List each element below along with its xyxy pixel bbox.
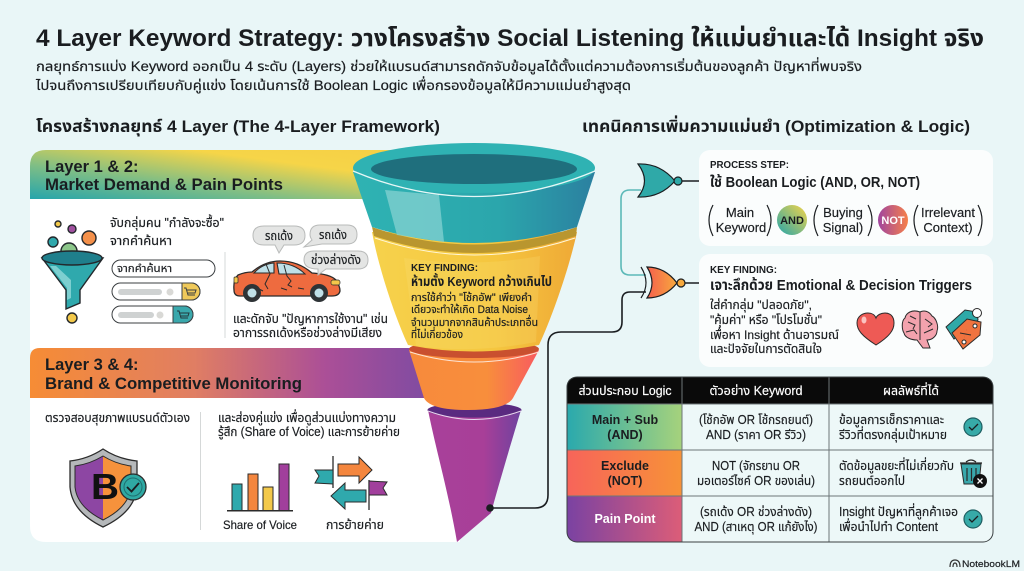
boolean formula [709, 205, 982, 236]
layer 1 header [30, 150, 400, 199]
funnel teal layer [353, 143, 595, 243]
competitor text: และส่องคู่แข่ง เพื่อดูส่วนแบ่งทางความ [218, 409, 396, 425]
icon: brain [902, 311, 938, 348]
funnel purple layer [428, 402, 522, 542]
row label: exclude: Exclude [601, 459, 649, 473]
funnel [353, 143, 595, 542]
pain point text: อาการรถเด้งหรือช่วงล่างมีเสียง [233, 326, 382, 340]
triggers body text [710, 298, 839, 356]
boolean formula: NOT [881, 215, 905, 227]
layer 3 header [30, 348, 440, 398]
funnel key finding: ที่ไม่เกี่ยวข้อง [411, 326, 463, 341]
keyword examples [694, 413, 818, 534]
layer 3 header: Layer 3 & 4: [45, 356, 139, 374]
share of voice chart [223, 464, 297, 532]
notebooklm mark: NotebookLM [962, 559, 1020, 570]
boolean formula: AND [780, 215, 804, 227]
keyword examples: (โช้กอัพ OR โช้กรถยนต์) [699, 413, 813, 427]
icon: damaged car [234, 261, 340, 302]
boolean formula: Irrelevant [921, 205, 975, 220]
intro text [35, 57, 862, 94]
layer 3 header: Brand & Competitive Monitoring [45, 375, 302, 393]
row label: main and sub [567, 404, 682, 450]
pain point text: และดักจับ "ปัญหาการใช้งาน" เช่น [233, 312, 388, 326]
panel: layer 3 and 4 [30, 348, 460, 542]
icon: heart [857, 313, 894, 345]
icon: trash [960, 460, 987, 488]
icon: brand switching arrows [315, 456, 387, 510]
heading: optimization: เทคนิคการเพิ่มความแม่นยำ (Optimization & Logic) [582, 115, 970, 136]
pain point text [233, 312, 388, 340]
table header: ส่วนประกอบ Logic [578, 384, 672, 398]
row label: exclude [567, 450, 682, 496]
panel: key finding triggers [699, 254, 993, 367]
panel: key finding triggers: เจาะลึกด้วย Emotional & Decision Triggers [710, 276, 972, 294]
search bars: จากคำค้นหา [117, 263, 172, 275]
search bars [112, 260, 215, 323]
search intent text [110, 214, 224, 248]
funnel key finding: KEY FINDING: [411, 262, 478, 274]
icon: funnel with balls [42, 221, 103, 323]
panel: process step [699, 150, 993, 246]
row label: main and sub: (AND) [607, 428, 643, 442]
triggers body text: เพื่อหา Insight ด้านอารมณ์ [710, 326, 839, 342]
icon: check [964, 510, 982, 528]
icon: price tags [946, 308, 982, 349]
funnel yellow layer [372, 227, 577, 352]
boolean formula: Main [726, 205, 754, 220]
boolean formula: Context) [923, 220, 973, 235]
funnel orange layer [409, 340, 539, 410]
boolean formula: Buying [823, 205, 863, 220]
intro text: ไปจนถึงการเปรียบเทียบกับคู่แข่ง โดยเน้นการใช้ Boolean Logic เพื่อกรองข้อมูลให้มีความแม่นยำสูงสุด [35, 76, 631, 94]
boolean formula: Signal) [823, 220, 863, 235]
connector: teal line between gates [621, 190, 646, 275]
title: 4 Layer Keyword Strategy: วางโครงสร้าง Social Listening ให้แม่นยำและได้ Insight จริง [36, 24, 984, 52]
competitor text: รู้สึก (Share of Voice) และการย้ายค่าย [218, 425, 400, 439]
funnel key finding: ห้ามตั้ง Keyword กว้างเกินไป [411, 272, 552, 289]
panel: process step: PROCESS STEP: [710, 159, 789, 171]
keyword examples: (รถเด้ง OR ช่วงล่างดัง) [700, 505, 812, 519]
label: brand switching: การย้ายค่าย [326, 518, 384, 532]
results: ข้อมูลการเช็กราคาและ [839, 413, 944, 427]
table header: ตัวอย่าง Keyword [710, 384, 803, 398]
heading: framework: โครงสร้างกลยุทธ์ 4 Layer (The 4-Layer Framework) [36, 117, 440, 137]
search intent text: จับกลุ่มคน "กำลังจะซื้อ" [110, 214, 224, 230]
competitor text [218, 409, 400, 439]
layer 1 header: Layer 1 & 2: [45, 158, 139, 176]
table header [567, 377, 993, 404]
panel: key finding triggers: KEY FINDING: [710, 264, 777, 276]
table header: ผลลัพธ์ที่ได้ [883, 382, 939, 398]
results: รถยนต์ออกไป [839, 474, 905, 488]
speech bubbles [253, 225, 368, 275]
logic gate: orange [641, 267, 699, 298]
icon: brand shield: B [91, 466, 119, 507]
boolean formula: Keyword [716, 220, 766, 235]
funnel key finding: เดียวจะทำให้เกิด Data Noise [411, 304, 528, 316]
share of voice chart: Share of Voice [223, 518, 297, 532]
table: logic components [567, 377, 993, 542]
speech bubbles: รถเด้ง [319, 228, 347, 242]
keyword examples: NOT (จักรยาน OR [712, 459, 800, 473]
speech bubbles: รถเด้ง [265, 229, 293, 243]
results: Insight ปัญหาที่ลูกค้าเจอ [839, 503, 958, 519]
intro text: กลยุทธ์การแบ่ง Keyword ออกเป็น 4 ระดับ (Layers) ช่วยให้แบรนด์สามารถดักจับข้อมูลได้ตั้งแต่ความต้องการเริ่มต้นของลูกค้า ปัญหาที่พบจริง [36, 57, 862, 75]
keyword examples: มอเตอร์ไซค์ OR ของเล่น) [697, 474, 815, 488]
row label: pain point: Pain Point [594, 512, 656, 526]
keyword examples: AND (ราคา OR รีวิว) [706, 428, 806, 442]
panel: layer 1 and 2 [30, 150, 420, 350]
results: ตัดข้อมูลขยะที่ไม่เกี่ยวกับ [839, 457, 954, 473]
triggers body text: และปัจจัยในการตัดสินใจ [710, 342, 822, 356]
search intent text: จากคำค้นหา [110, 234, 172, 248]
speech bubbles: ช่วงล่างดัง [311, 253, 361, 267]
row label: pain point [567, 496, 682, 542]
funnel key finding: การใช้คำว่า "โช้กอัพ" เพียงคำ [411, 291, 532, 304]
logic gate: teal [638, 164, 699, 197]
icon: check [964, 418, 982, 436]
connector: funnel to logic gate [487, 292, 646, 511]
results [839, 413, 958, 534]
results: เพื่อนำไปทำ Content [839, 518, 939, 534]
icon: brand shield [70, 449, 146, 527]
layer 1 header: Market Demand & Pain Points [45, 176, 283, 194]
triggers body text: ใส่คำกลุ่ม "ปลอดภัย", [710, 298, 812, 312]
row label: main and sub: Main + Sub [592, 413, 659, 427]
keyword examples: AND (สาเหตุ OR แก้ยังไง) [694, 520, 818, 534]
triggers body text: "คุ้มค่า" หรือ "โปรโมชั่น" [710, 312, 822, 327]
funnel key finding [411, 262, 552, 341]
row label: exclude: (NOT) [608, 474, 642, 488]
funnel key finding: จำนวนมากจากสินค้าประเภทอื่น [411, 314, 538, 329]
panel: process step: ใช้ Boolean Logic (AND, OR, NOT) [710, 173, 920, 191]
results: รีวิวที่ตรงกลุ่มเป้าหมาย [839, 426, 947, 442]
brand health text: ตรวจสอบสุขภาพแบรนด์ตัวเอง [45, 411, 190, 425]
